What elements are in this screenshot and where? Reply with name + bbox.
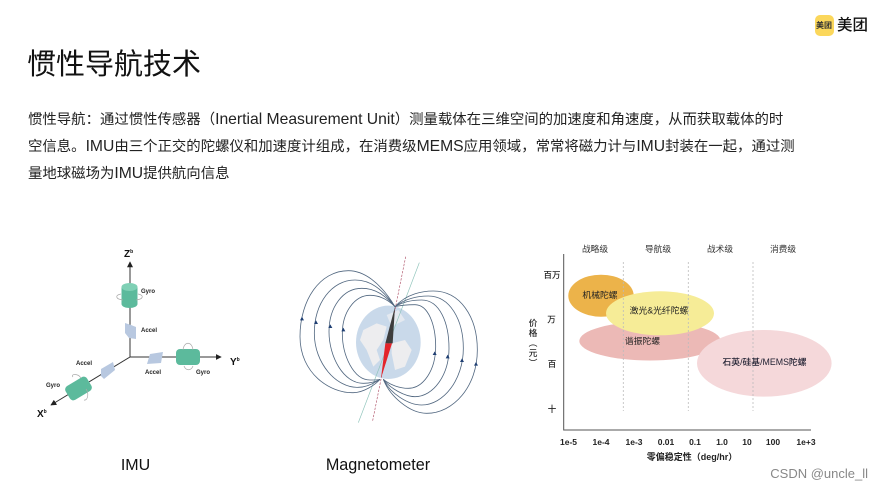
axis labels: b [237,357,240,363]
axis labels [37,249,240,420]
text block: description [28,111,795,182]
x axis ticks: 1.0 [716,437,728,447]
Z accel [125,323,136,339]
bubble: laser and fiber gyro [606,291,714,335]
grade labels: 消费级 [770,243,796,254]
y axis ticks: 百 [548,359,556,369]
text block: description: 量地球磁场为IMU提供航向信息 [28,165,229,182]
y axis title: 格 [529,327,538,338]
logo: Meituan: 美团 [816,21,832,30]
x axis ticks [560,437,816,447]
y axis ticks: 十 [548,404,557,414]
component labels: Accel [76,361,92,367]
axis labels: Y [230,357,237,368]
component labels: Gyro [196,370,210,376]
grade labels [582,243,796,254]
y axis title: ︵ [529,338,538,348]
axes [373,257,406,421]
logo: Meituan: 美团 [837,17,868,34]
bubble: resonant gyro [579,322,721,360]
x axis ticks: 0.1 [689,437,701,447]
y axis ticks: 万 [547,314,556,324]
compass needle [381,307,395,378]
bubble: mechanical gyro [568,275,634,317]
field lines [300,271,477,413]
component labels: Gyro [141,289,155,295]
grade labels: 导航级 [645,243,671,254]
bubble labels: 石英/硅基/MEMS陀螺 [722,356,807,367]
x axis ticks: 100 [766,437,780,447]
x axis ticks: 1e-4 [592,437,610,447]
x axis ticks: 1e-5 [560,437,577,447]
y axis ticks: 百万 [543,270,561,280]
Y accel [147,352,163,364]
y axis title [529,318,538,368]
x axis ticks: 1e-3 [625,437,643,447]
grade labels: 战术级 [707,243,733,254]
component labels: Accel [145,370,161,376]
y axis title: 价 [529,318,538,328]
bubble labels: 谐振陀螺 [625,335,660,346]
earth globe [356,306,421,379]
y axis title: 元 [529,348,538,358]
x axis ticks: 10 [742,437,752,447]
watermark: CSDN @uncle_ll [770,466,868,481]
component labels: Accel [141,328,157,334]
label: IMU: IMU [121,457,150,474]
quadrant dividers [623,262,753,411]
chart: gyro price vs bias stability [529,243,832,462]
x axis title: 零偏稳定性（deg/hr） [647,451,737,462]
bubble labels [582,289,807,367]
component labels [46,289,210,389]
axis labels: X [37,409,44,420]
bubble labels: 机械陀螺 [582,289,618,300]
X gyro [64,374,93,402]
y axis ticks [543,270,561,414]
axis labels: Z [124,249,130,260]
Z gyro [117,283,142,308]
bubble: quartz silicon MEMS gyro [697,330,832,397]
x axis ticks: 0.01 [658,437,675,447]
text block: description: 惯性导航：通过惯性传感器（Inertial Measurement Unit）测量载体在三维空间的加速度和角速度，从而获取载体的时 [28,111,783,128]
Y gyro [176,343,200,370]
label: Magnetometer: Magnetometer [326,456,431,474]
bubble labels: 激光&光纤陀螺 [630,304,689,316]
X accel [101,362,115,379]
axes [564,254,811,430]
text block: description: 空信息。IMU由三个正交的陀螺仪和加速度计组成，在消费级MEMS应用领域，常常将磁力计与IMU封装在一起，通过测 [28,138,795,155]
axis labels: b [130,249,133,255]
axes [51,262,221,405]
axis labels: b [44,409,47,415]
logo: Meituan [815,15,868,36]
diagram: magnetometer [300,257,478,423]
title: 惯性导航技术 [27,49,201,81]
diagram: IMU [37,249,240,420]
field arrows [300,317,478,366]
y axis title: ︶ [529,358,538,368]
component labels: Gyro [46,383,60,389]
x axis ticks: 1e+3 [796,437,816,447]
grade labels: 战略级 [582,243,608,254]
